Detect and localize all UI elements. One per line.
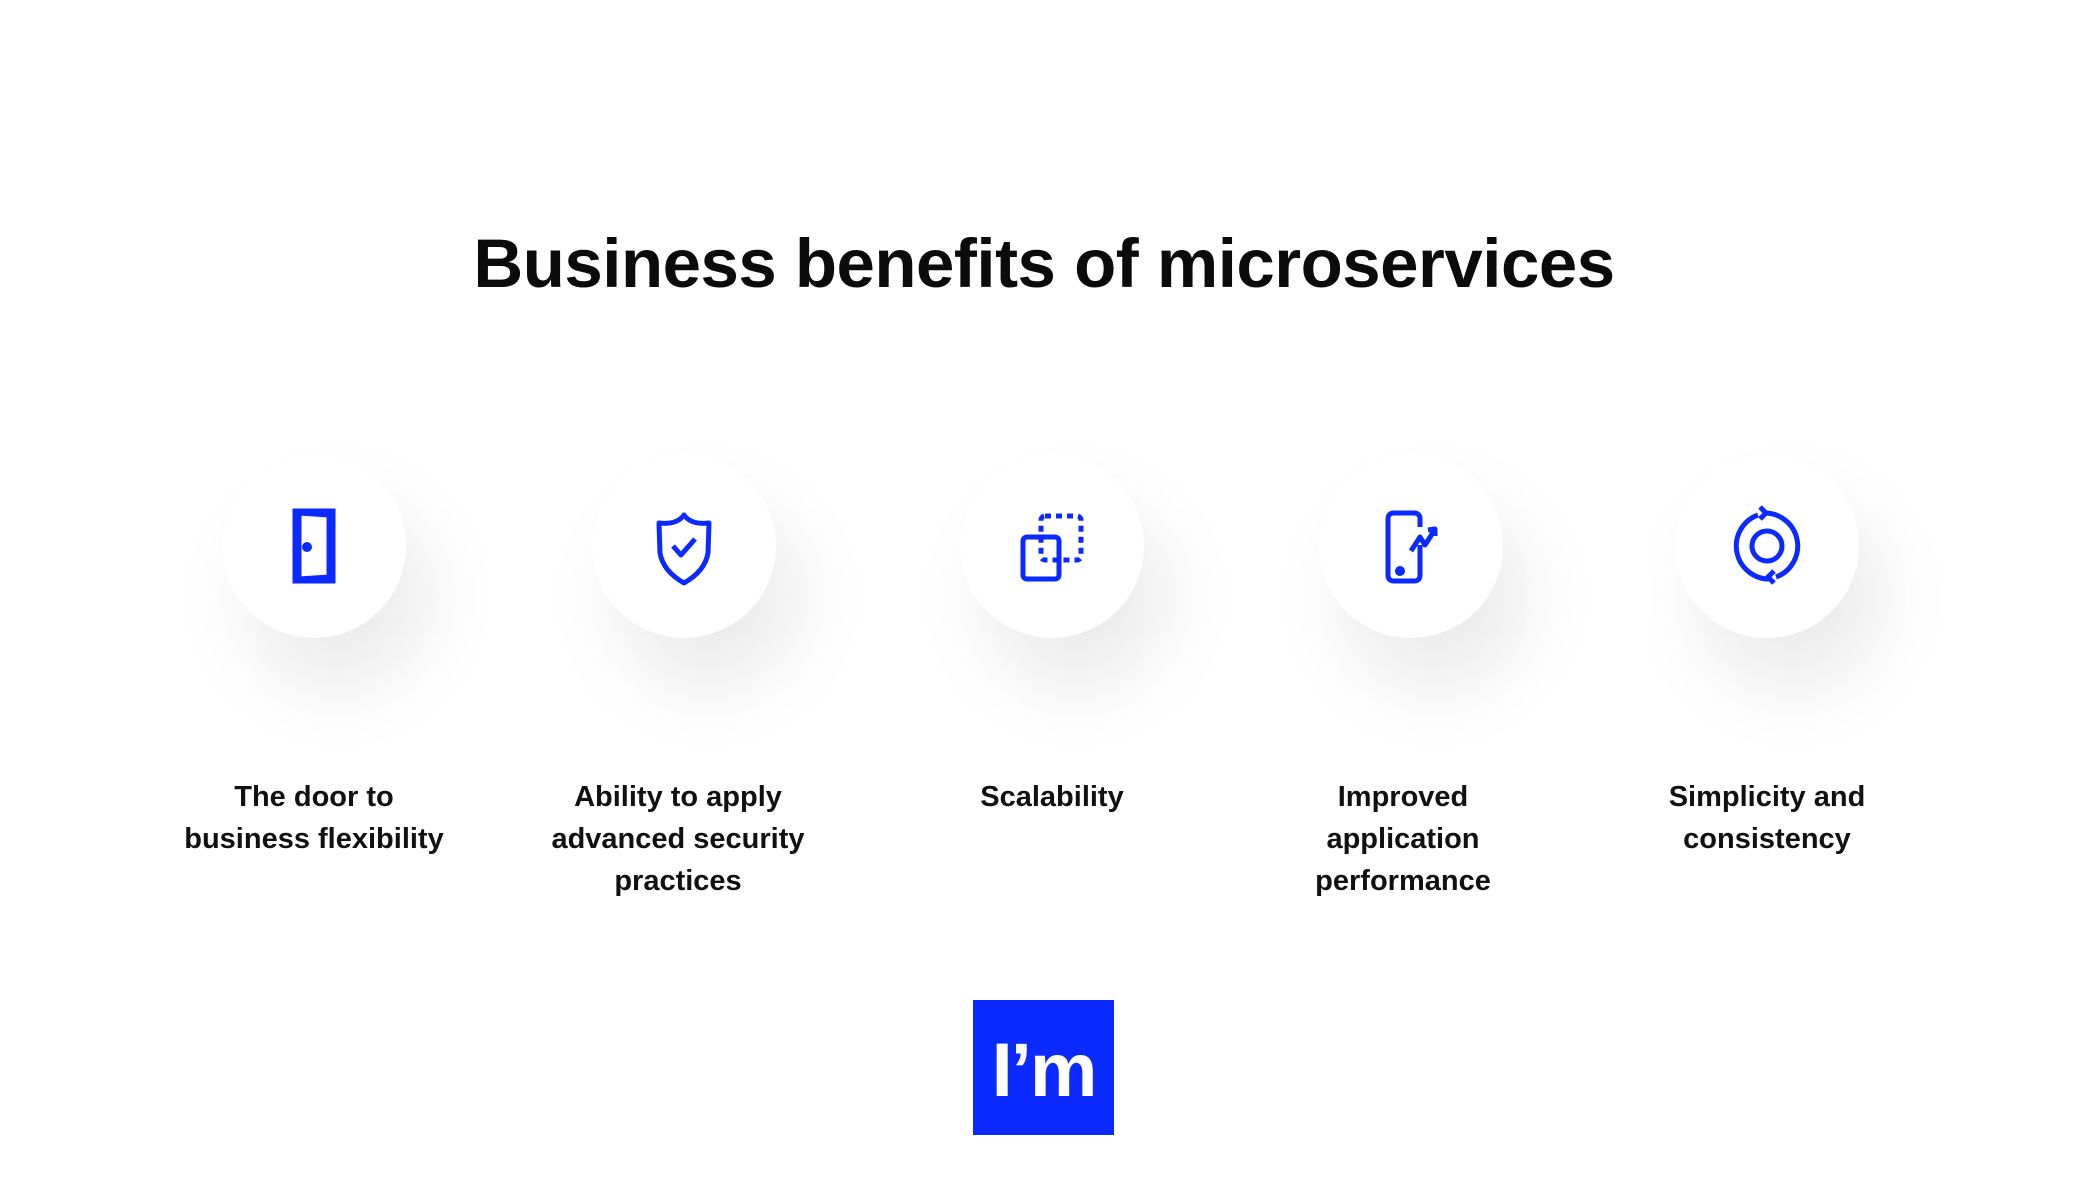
label 3: Scalability — [980, 781, 1124, 813]
icon: cycle — [1675, 454, 1859, 638]
label 4: performance — [1315, 865, 1491, 897]
label 2 — [551, 781, 805, 897]
label 4: Improved — [1338, 781, 1468, 813]
label 5: Simplicity and — [1669, 781, 1865, 813]
label 2: practices — [614, 865, 742, 897]
logo: I’m — [992, 1028, 1095, 1113]
icon: shield — [592, 454, 776, 638]
label 1: The door to — [234, 781, 394, 813]
logo — [973, 1000, 1114, 1135]
icon: scalability — [960, 454, 1144, 638]
icon: phone performance — [1319, 454, 1503, 638]
title: Business benefits of microservices — [473, 225, 1615, 302]
label 1: business flexibility — [184, 823, 444, 855]
label 5 — [1669, 781, 1865, 855]
icon: door — [222, 454, 406, 638]
label 2: Ability to apply — [574, 781, 782, 813]
label 4: application — [1326, 823, 1480, 855]
label 2: advanced security — [551, 823, 805, 855]
label 1 — [184, 781, 444, 855]
label 5: consistency — [1683, 823, 1851, 855]
label 4 — [1315, 781, 1491, 897]
